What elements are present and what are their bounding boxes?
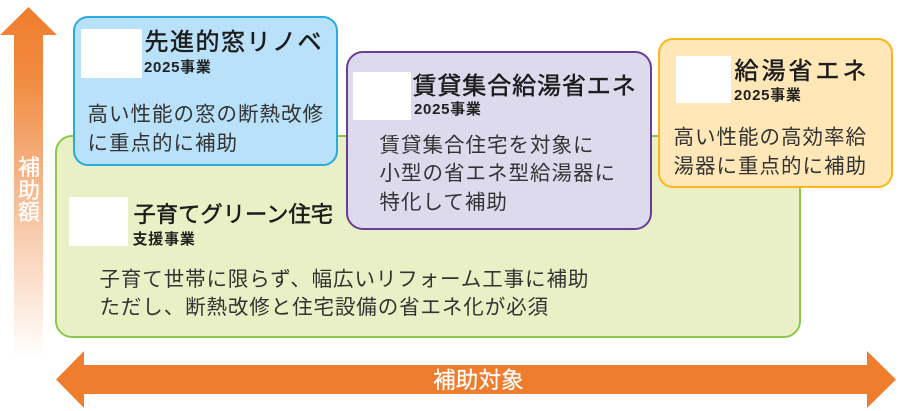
label: subsidy amount: 補助額: [18, 155, 40, 225]
subheading: 2025事業: [414, 100, 482, 118]
subheading: 2025事業: [144, 58, 212, 76]
logo placeholder: [80, 28, 142, 78]
description: [674, 126, 867, 178]
heading: 給湯省エネ: [734, 58, 870, 84]
heading: 先進的窓リノベ: [144, 28, 323, 56]
description: 子育て世帯に限らず、幅広いリフォーム工事に補助: [100, 268, 589, 290]
description: 高い性能の窓の断熱改修: [88, 103, 324, 126]
heading: 賃貸集合給湯省エネ: [412, 72, 637, 100]
description: [100, 268, 589, 319]
panel: advanced window renovation: [73, 16, 338, 166]
description: 小型の省エネ型給湯器に: [380, 162, 616, 185]
logo placeholder: [676, 56, 730, 102]
panel: water heater energy saving: [658, 38, 893, 188]
subheading: 支援事業: [132, 230, 196, 248]
panel: child-rearing green housing: [55, 135, 801, 338]
description: ただし、断熱改修と住宅設備の省エネ化が必須: [100, 296, 549, 319]
label: subsidy target: 補助対象: [433, 366, 524, 392]
description: 高い性能の高効率給: [674, 126, 867, 148]
description: [380, 134, 616, 214]
heading: 子育てグリーン住宅: [134, 202, 333, 226]
logo placeholder: [68, 196, 128, 246]
subheading: 2025事業: [734, 86, 802, 104]
description: [88, 103, 324, 155]
logo placeholder: [352, 72, 410, 120]
panel: rental housing water heater: [346, 51, 652, 230]
description: に重点的に補助: [88, 132, 238, 155]
description: 湯器に重点的に補助: [674, 154, 867, 178]
description: 特化して補助: [380, 190, 508, 214]
description: 賃貸集合住宅を対象に: [380, 134, 594, 156]
